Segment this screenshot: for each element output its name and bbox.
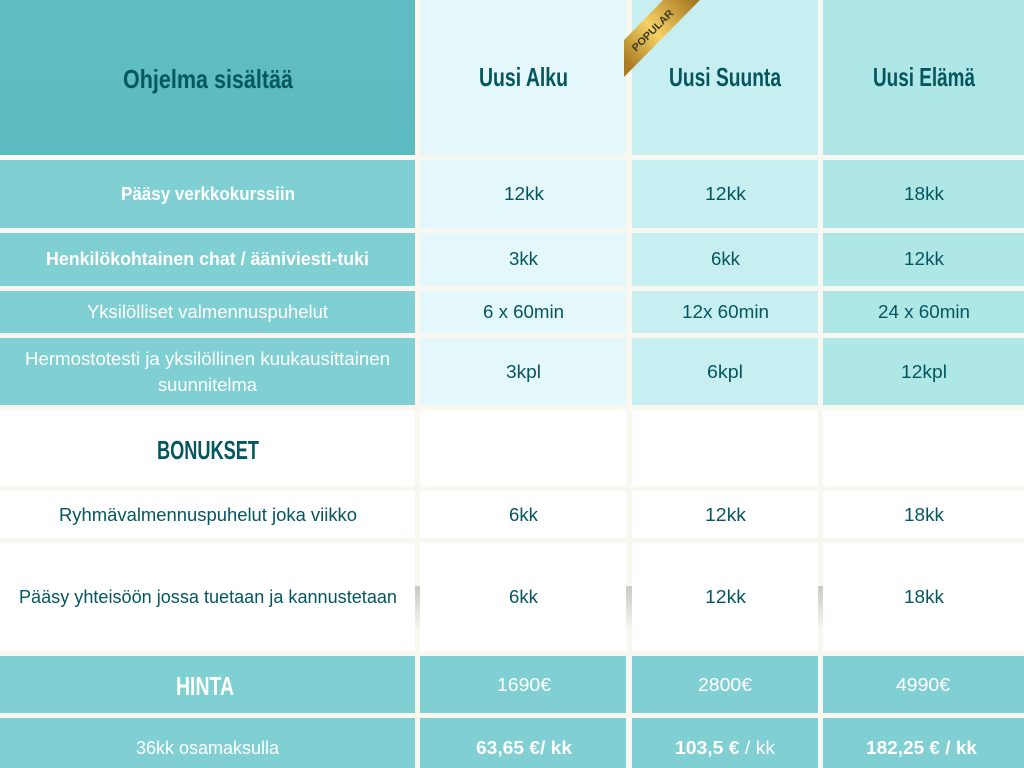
row: community access: 18kk (904, 586, 945, 607)
row: group coaching calls: Ryhmävalmennuspuhelut joka viikko (59, 504, 357, 525)
row: coaching calls: 12x 60min (682, 301, 769, 322)
row: personal chat support: Henkilökohtainen chat / ääniviesti-tuki (46, 248, 369, 269)
row: personal chat support: 3kk (509, 248, 539, 269)
row: nervous system test: suunnitelma (158, 374, 258, 395)
row: nervous system test: 12kpl (901, 361, 947, 382)
row: price (0, 656, 1024, 713)
row: personal chat support (0, 233, 1024, 286)
row: installment price: 36kk osamaksulla (136, 737, 280, 758)
popular ribbon (624, 0, 700, 77)
row: price: 1690€ (497, 674, 552, 695)
row: coaching calls: 24 x 60min (878, 301, 970, 322)
row: group coaching calls: 18kk (904, 504, 945, 525)
row: bonuses heading (0, 410, 1024, 486)
row: nervous system test: 6kpl (707, 361, 743, 382)
row: nervous system test: 3kpl (506, 361, 541, 382)
row: course access (0, 160, 1024, 228)
row: course access: 12kk (705, 183, 747, 204)
row: community access: 6kk (509, 586, 539, 607)
row: personal chat support: 12kk (904, 248, 945, 269)
row: installment price: 63,65 €/ kk (476, 737, 573, 758)
row: price: HINTA (176, 671, 234, 701)
row: group coaching calls (0, 491, 1024, 538)
row: community access: 12kk (705, 586, 747, 607)
row: coaching calls: Yksilölliset valmennuspuhelut (87, 301, 328, 322)
row: installment price: 103,5 € / kk (675, 737, 776, 758)
row: price: 2800€ (698, 674, 753, 695)
row: installment price: 182,25 € / kk (866, 737, 978, 758)
row: community access: Pääsy yhteisöön jossa tuetaan ja kannustetaan (19, 586, 397, 607)
heading: program includes: Ohjelma sisältää (123, 64, 293, 94)
row: course access: Pääsy verkkokurssiin (121, 183, 295, 204)
heading: Uusi Suunta: Uusi Suunta (669, 62, 781, 92)
heading: Uusi Alku: Uusi Alku (479, 62, 568, 92)
row: nervous system test (0, 338, 1024, 405)
row: course access: 18kk (904, 183, 945, 204)
row: bonuses heading: BONUKSET (157, 435, 259, 465)
row: personal chat support: 6kk (711, 248, 741, 269)
header row (0, 0, 1024, 155)
row: course access: 12kk (504, 183, 545, 204)
row: community access (0, 543, 1024, 651)
row: coaching calls (0, 291, 1024, 333)
row: price: 4990€ (896, 674, 951, 695)
popular ribbon: POPULAR (630, 7, 677, 54)
row: installment price (0, 718, 1024, 768)
row: group coaching calls: 12kk (705, 504, 747, 525)
heading: Uusi Elämä: Uusi Elämä (873, 62, 975, 92)
row: coaching calls: 6 x 60min (483, 301, 564, 322)
row: nervous system test: Hermostotesti ja yksilöllinen kuukausittainen (25, 348, 390, 369)
row: group coaching calls: 6kk (509, 504, 539, 525)
